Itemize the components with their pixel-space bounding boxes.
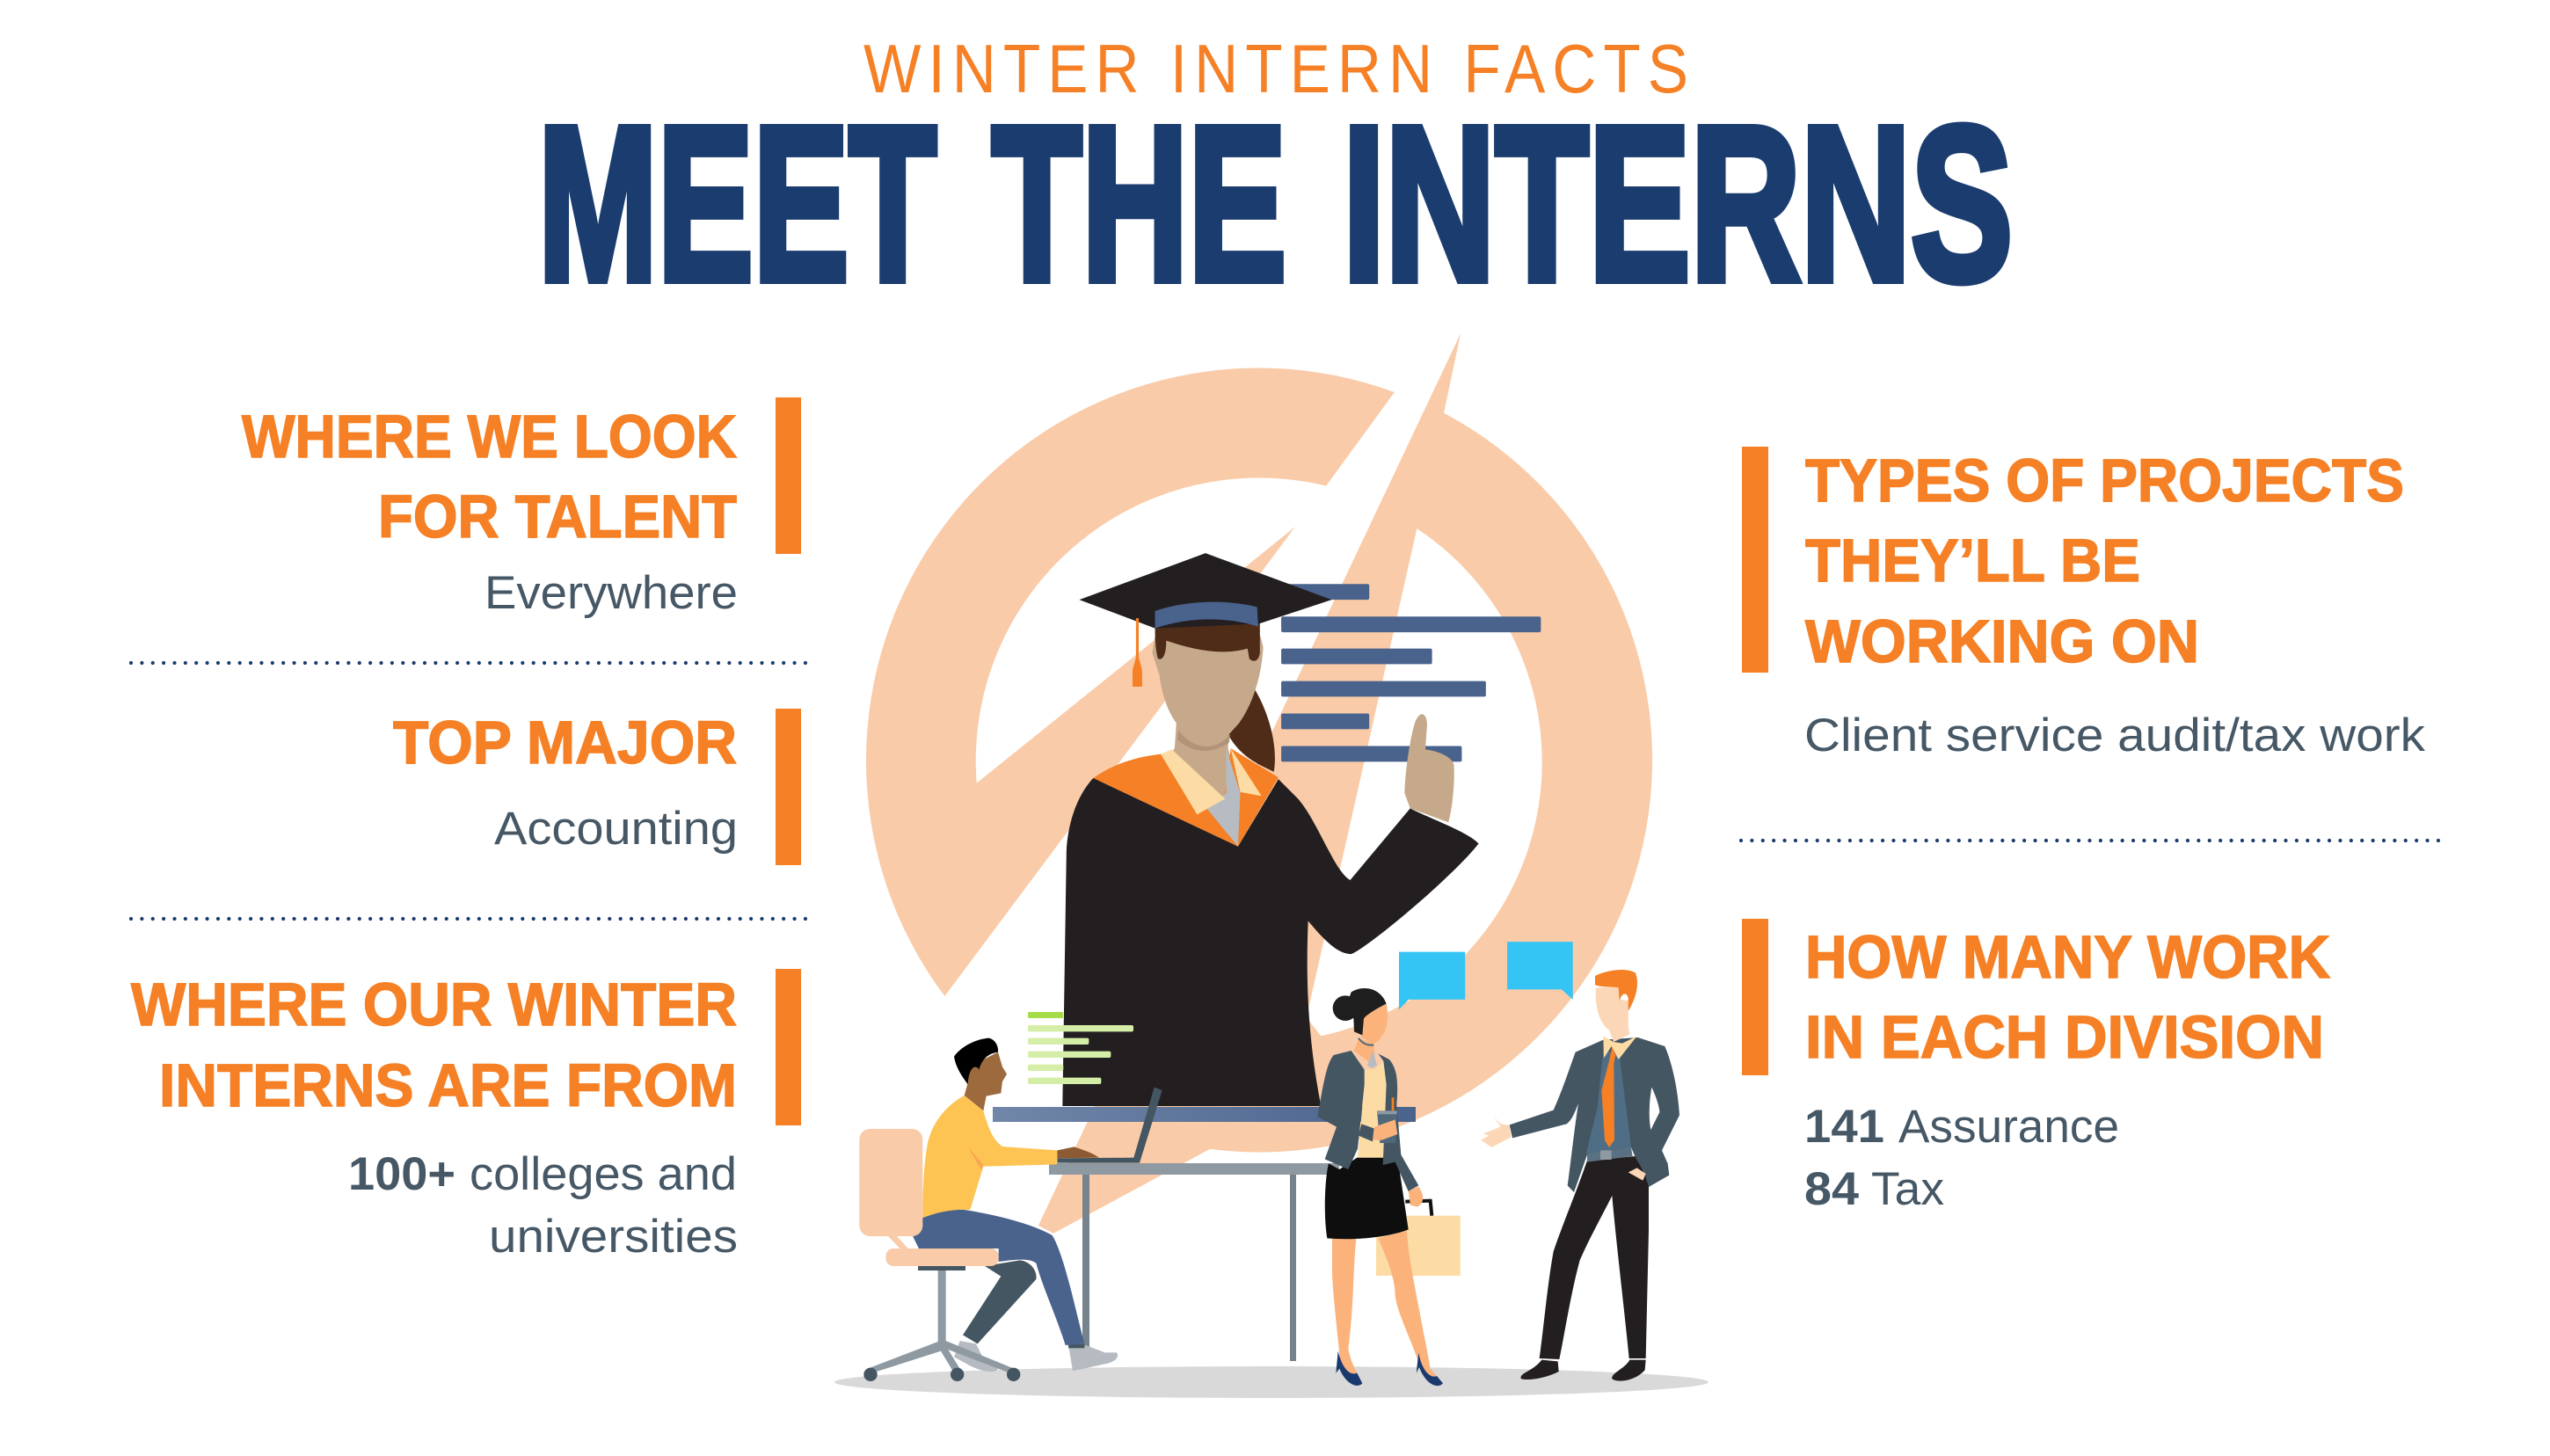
accent bar [1742, 919, 1768, 1075]
laptop [1057, 1088, 1162, 1163]
tie [1601, 1047, 1615, 1147]
heading: INTERNS ARE FROM [159, 1052, 737, 1119]
main heading: meet the interns: THE [992, 81, 1286, 326]
cup [1377, 1097, 1397, 1143]
illustration: central scene [834, 333, 1708, 1398]
body text: colleges and [470, 1148, 737, 1200]
face [1361, 1004, 1388, 1044]
title block [538, 30, 2013, 326]
body text: 100+ [348, 1148, 455, 1200]
accent bar [776, 709, 801, 865]
ground shadow [834, 1366, 1708, 1398]
shoes [1521, 1360, 1646, 1381]
chair seat [885, 1249, 999, 1266]
main heading: meet the interns: MEET [538, 81, 936, 326]
table [1049, 1163, 1339, 1361]
trousers [1540, 1156, 1649, 1359]
logo ring and graduate [866, 333, 1652, 1234]
far shoe [954, 1341, 998, 1372]
collar [1161, 749, 1225, 814]
speech bubble right [1507, 942, 1573, 1000]
mortarboard [1079, 553, 1331, 629]
main heading: meet the interns [538, 81, 2013, 326]
heading: WHERE OUR WINTER [131, 971, 737, 1038]
body text: Assurance [1898, 1101, 2119, 1153]
cap band [1155, 602, 1258, 629]
gown [1062, 778, 1479, 1106]
hood [1093, 748, 1279, 847]
body text: Accounting [494, 803, 738, 855]
shoes [1336, 1351, 1362, 1386]
blouse [1352, 1051, 1387, 1158]
blouse collar [1367, 1051, 1377, 1068]
near leg [913, 1210, 1084, 1345]
shirt [1205, 748, 1240, 847]
far leg [963, 1260, 1037, 1343]
collar [1603, 1036, 1637, 1059]
hand holding bag [1409, 1186, 1423, 1207]
outstretched hand [1481, 1117, 1511, 1147]
hand in pocket [1628, 1168, 1646, 1181]
hair [1155, 622, 1260, 661]
standing man [1481, 970, 1679, 1381]
chair base [863, 1266, 1020, 1381]
jacket [1317, 1051, 1418, 1191]
hair [954, 1038, 998, 1084]
panel: where we look for talent [242, 397, 801, 619]
podium bar [993, 1107, 1416, 1122]
body text: Tax [1871, 1163, 1944, 1215]
jacket [1510, 1037, 1679, 1192]
heading [242, 403, 737, 550]
heading: WHERE WE LOOK [242, 403, 737, 470]
body text: 141 [1804, 1101, 1884, 1153]
body text: universities [489, 1211, 738, 1263]
head and neck [965, 1052, 1007, 1110]
hand with cup [1373, 1119, 1397, 1140]
logo ring: left piece [866, 368, 1395, 996]
heading: TYPES OF PROJECTS [1805, 447, 2404, 514]
hair [1333, 988, 1387, 1035]
ponytail [1228, 687, 1275, 772]
tassel [1133, 618, 1142, 687]
heading [1805, 923, 2330, 1071]
standing woman [1317, 988, 1461, 1386]
heading: HOW MANY WORK [1805, 923, 2330, 991]
body text [1804, 1101, 2119, 1215]
neck [1354, 1039, 1374, 1064]
waistcoat [1586, 1049, 1631, 1154]
accent bar [776, 397, 801, 554]
eyebrow: winter intern facts: WINTER INTERN FACTS [863, 30, 1695, 107]
shopping bag [1376, 1216, 1461, 1276]
legs [1332, 1238, 1359, 1376]
sleeve [1359, 1124, 1374, 1141]
panel: types of projects [1742, 447, 2426, 761]
accent bar [776, 969, 801, 1125]
green code lines [1028, 1012, 1133, 1084]
bag handle [1405, 1201, 1432, 1216]
body text: Client service audit/tax work [1804, 710, 2426, 761]
hair [1595, 970, 1637, 1011]
heading [131, 971, 737, 1119]
belt [1587, 1147, 1633, 1162]
heading: IN EACH DIVISION [1805, 1003, 2324, 1071]
seated man at desk with chair [859, 1012, 1162, 1381]
body text: 84 [1804, 1163, 1860, 1215]
near shoe [1069, 1345, 1118, 1371]
heading [1805, 447, 2404, 675]
accent bar [1742, 447, 1768, 673]
skirt [1325, 1158, 1409, 1239]
panel: top major [393, 709, 801, 865]
face and neck [1152, 637, 1264, 810]
body text: Everywhere [484, 567, 738, 619]
chair back [859, 1129, 922, 1236]
heading: TOP MAJOR [393, 709, 737, 776]
heading: WORKING ON [1805, 608, 2199, 675]
speech bubble left [1399, 952, 1465, 1009]
face and neck [1596, 986, 1629, 1042]
heading: THEY’LL BE [1805, 527, 2140, 594]
panel: where our winter interns are from [131, 969, 801, 1263]
main heading: meet the interns: INTERNS [1343, 81, 2013, 326]
logo ring: right piece [1038, 333, 1652, 1234]
graduate figure [1062, 553, 1479, 1106]
body text [348, 1148, 738, 1263]
necklace [1359, 1038, 1373, 1045]
hand [1057, 1147, 1099, 1158]
heading: FOR TALENT [378, 483, 737, 550]
sweater [922, 1096, 1057, 1218]
panel: how many work in each division [1742, 919, 2330, 1215]
hand [1404, 714, 1454, 822]
slide bars [1281, 584, 1541, 761]
